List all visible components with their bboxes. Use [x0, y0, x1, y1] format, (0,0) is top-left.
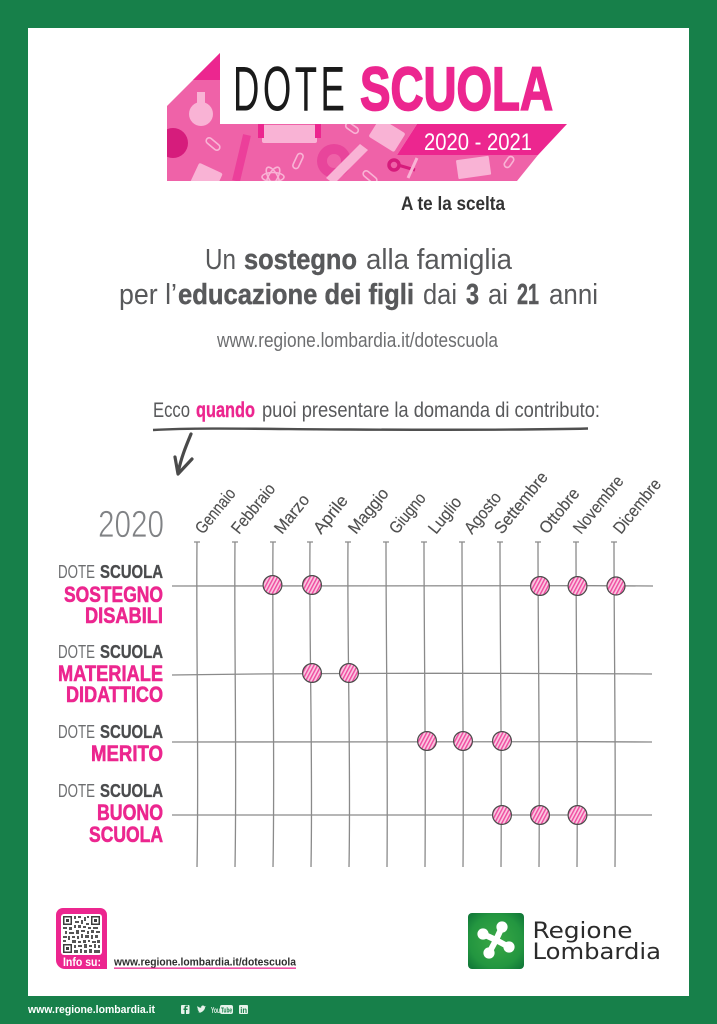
- headline: [119, 244, 598, 311]
- row: Merito: MERITO: [91, 741, 163, 766]
- logo: Regione Lombardia: Lombardia: [532, 940, 661, 965]
- website address: www.regione.lombardia.it/dotescuola: [216, 330, 499, 352]
- row: Sostegno Disabili: DISABILI: [85, 603, 163, 628]
- row: Materiale Didattico: [58, 642, 358, 707]
- row: Buono Scuola: DOTE: [58, 781, 95, 801]
- headline: dai: [423, 279, 457, 311]
- month labels: Gennaio: [191, 484, 239, 538]
- social icons: [181, 1005, 248, 1015]
- month labels: Novembre: [569, 472, 628, 538]
- headline: 3: [466, 279, 479, 311]
- month labels: Aprile: [309, 491, 352, 538]
- month labels: Giugno: [385, 489, 430, 538]
- month labels: Febbraio: [227, 480, 279, 538]
- logo: Regione Lombardia: [468, 913, 661, 969]
- row: Sostegno Disabili: SCUOLA: [100, 562, 163, 582]
- row: Materiale Didattico: SCUOLA: [100, 642, 163, 662]
- row: Materiale Didattico: DOTE: [58, 642, 95, 662]
- headline: sostegno: [244, 244, 357, 276]
- footer website: www.regione.lombardia.it: [27, 1004, 155, 1016]
- row: Merito: [58, 722, 511, 766]
- month labels: Settembre: [490, 468, 552, 538]
- headline: educazione dei figli: [178, 279, 414, 311]
- social icons: Tube: [221, 1008, 232, 1014]
- intro sentence: quando: [196, 399, 255, 422]
- row: Sostegno Disabili: DOTE: [58, 562, 95, 582]
- month labels: Agosto: [460, 488, 505, 538]
- headline: 21: [517, 279, 539, 311]
- logo wording: Regione: [532, 919, 632, 944]
- month labels: Dicembre: [609, 475, 665, 538]
- headline: ai: [488, 279, 508, 311]
- month labels: Marzo: [270, 491, 313, 538]
- headline: per l’: [119, 279, 177, 311]
- headline: Un: [205, 244, 236, 276]
- logo year: 2020 - 2021: [424, 129, 532, 156]
- logo: Dote Scuola banner: [167, 53, 567, 181]
- row: Merito: SCUOLA: [100, 722, 163, 742]
- headline: alla famiglia: [366, 244, 513, 276]
- month labels: Maggio: [344, 484, 392, 538]
- row: Buono Scuola: BUONO: [97, 800, 163, 825]
- headline: anni: [549, 279, 598, 311]
- row: Merito: DOTE: [58, 722, 95, 742]
- month labels: [191, 468, 665, 538]
- month labels: Luglio: [424, 493, 466, 538]
- intro sentence: Ecco: [153, 399, 190, 422]
- month labels: Ottobre: [535, 484, 583, 538]
- QR code badge: [56, 908, 107, 969]
- row: Buono Scuola: SCUOLA: [100, 781, 163, 801]
- QR caption: Info su:: [63, 957, 101, 969]
- social icons: You: [211, 1006, 220, 1015]
- sketched underline: [153, 428, 588, 430]
- intro sentence: puoi presentare la domanda di contributo:: [262, 399, 600, 422]
- social icons: in: [240, 1006, 247, 1015]
- tagline: A te la scelta: [401, 194, 505, 215]
- logo word: DOTE: DOTE: [233, 53, 345, 124]
- arrow: [175, 434, 192, 474]
- row: Materiale Didattico: MATERIALE: [58, 661, 163, 686]
- calendar grid: [172, 542, 653, 867]
- footer link with pink underline: www.regione.lombardia.it/dotescuola: [113, 956, 297, 968]
- intro sentence: [153, 399, 600, 422]
- row: Materiale Didattico: DIDATTICO: [66, 682, 163, 707]
- row: Sostegno Disabili: SOSTEGNO: [64, 582, 163, 607]
- row: Sostegno Disabili: [58, 562, 625, 628]
- logo word: SCUOLA: SCUOLA: [360, 55, 553, 123]
- year label: 2020: [98, 504, 164, 546]
- row: Buono Scuola: SCUOLA: [89, 822, 163, 847]
- row: Buono Scuola: [58, 781, 587, 847]
